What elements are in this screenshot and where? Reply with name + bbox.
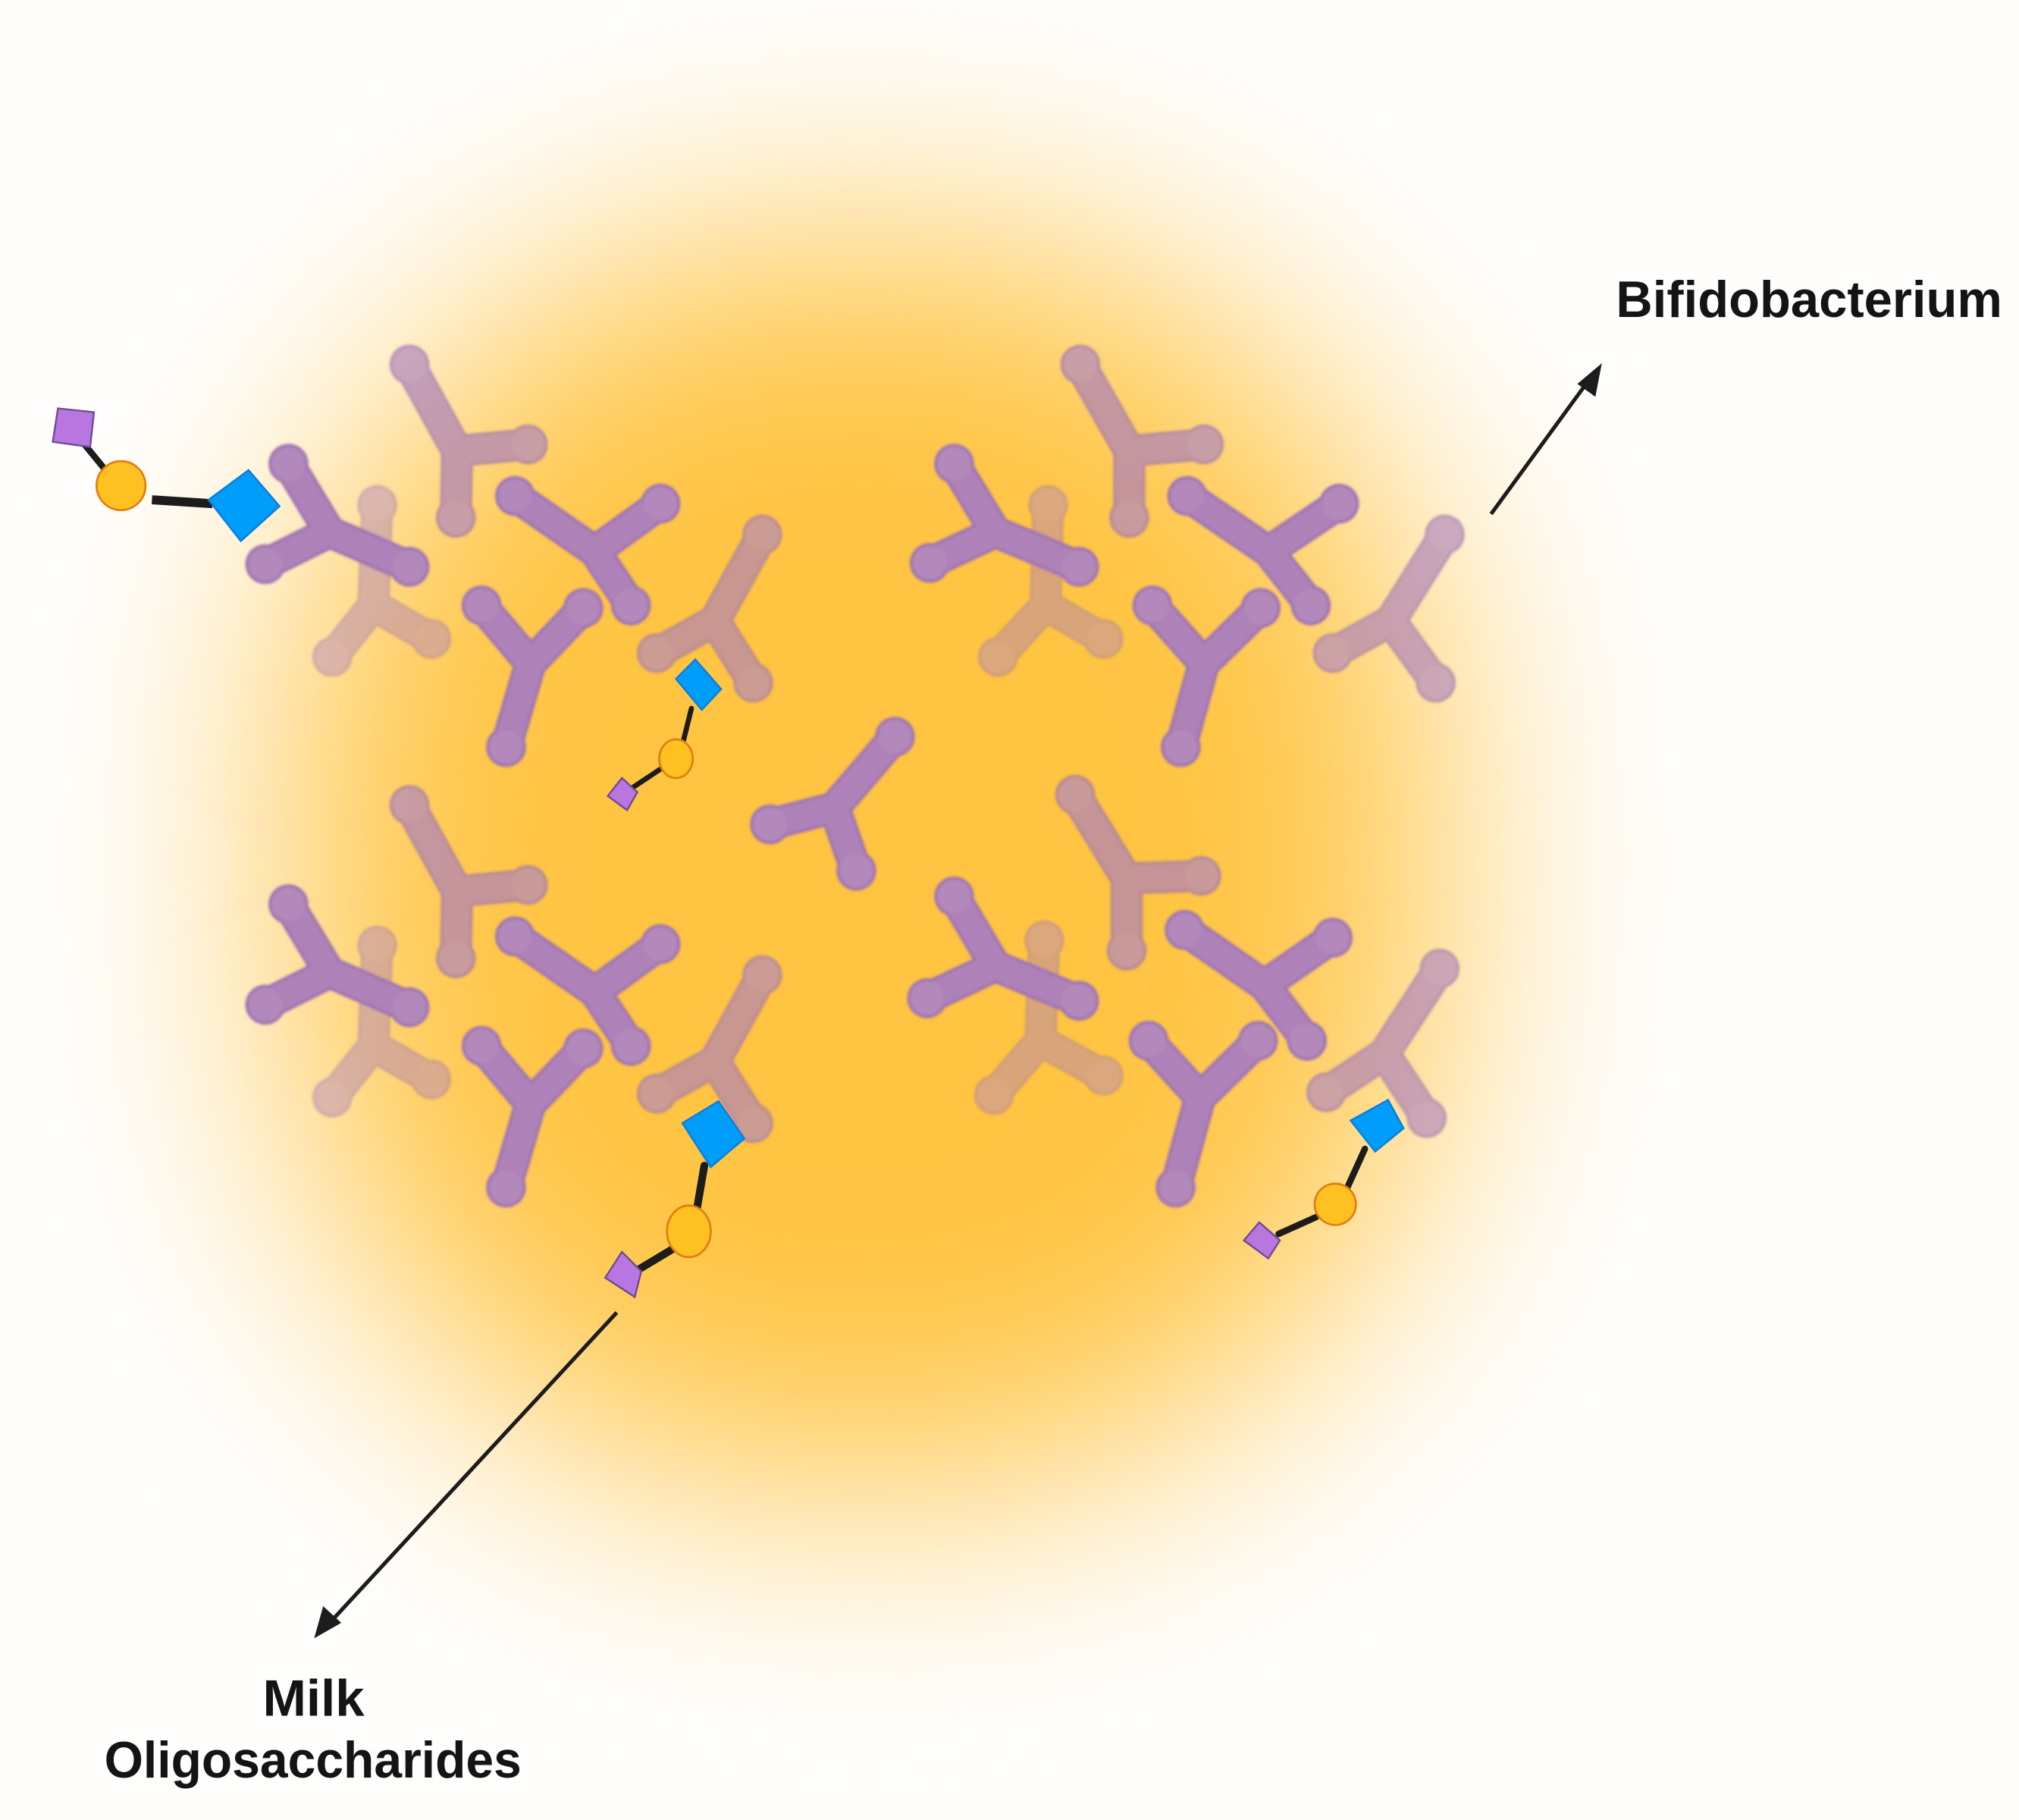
bacterium: front X: [927, 896, 1079, 1001]
bacterium: faded right: [657, 535, 762, 682]
bacterium: faded right: [657, 975, 762, 1123]
bacterium: upper right: [1187, 496, 1339, 605]
bacterium: faded T: [1075, 795, 1202, 950]
arrow: to Bifidobacterium: [1491, 363, 1602, 514]
bacterium: upper right: [1184, 930, 1333, 1040]
oligosaccharide: upper left, large: [53, 408, 280, 541]
bacterium: faded T: [409, 805, 528, 959]
bacterium: lower Y: [481, 605, 583, 747]
bacterium: faded back: [332, 946, 431, 1097]
cluster: upper right bacteria: [930, 365, 1445, 747]
arrow: to Milk Oligosaccharides: [314, 1313, 617, 1638]
bacteria colony: [265, 365, 1445, 1188]
label: Milk Oligosaccharides: Milk: [262, 1670, 365, 1727]
cluster: lower right bacteria: [927, 795, 1440, 1188]
bacterial colony glow: [290, 238, 1436, 1488]
bacterium: faded right: [1326, 968, 1440, 1118]
bacterium: front X: [930, 464, 1079, 566]
bacterium: front X: [265, 904, 409, 1007]
bacterium: lower Y: [1152, 605, 1261, 747]
bacterium: upper right: [515, 496, 660, 605]
bacterium: faded back: [994, 940, 1103, 1095]
bacterium: front X: [265, 464, 409, 566]
label: Milk Oligosaccharides: [105, 1670, 522, 1789]
oligosaccharide: lower right: [1244, 1100, 1403, 1258]
label: Bifidobacterium: Bifidobacterium: [1616, 271, 2002, 328]
bacterium: faded right: [1333, 535, 1445, 682]
label: Milk Oligosaccharides: Oligosaccharides: [105, 1732, 522, 1789]
bacterium: faded back: [332, 505, 431, 657]
bacterium: faded T: [409, 365, 528, 518]
cluster: lower left bacteria: [265, 805, 762, 1188]
bacterium: lower Y: [481, 1046, 583, 1188]
bacterium: upper right: [515, 937, 660, 1046]
oligosaccharide: lower, large: [605, 1101, 745, 1297]
bacterium: lower Y: [1149, 1040, 1258, 1188]
cluster: upper left bacteria: [265, 365, 762, 747]
bacterium: faded T: [1080, 365, 1204, 518]
bacterium: centre: [770, 737, 895, 871]
bacterium: faded back: [998, 505, 1103, 657]
oligosaccharide: middle, small: [608, 660, 721, 810]
